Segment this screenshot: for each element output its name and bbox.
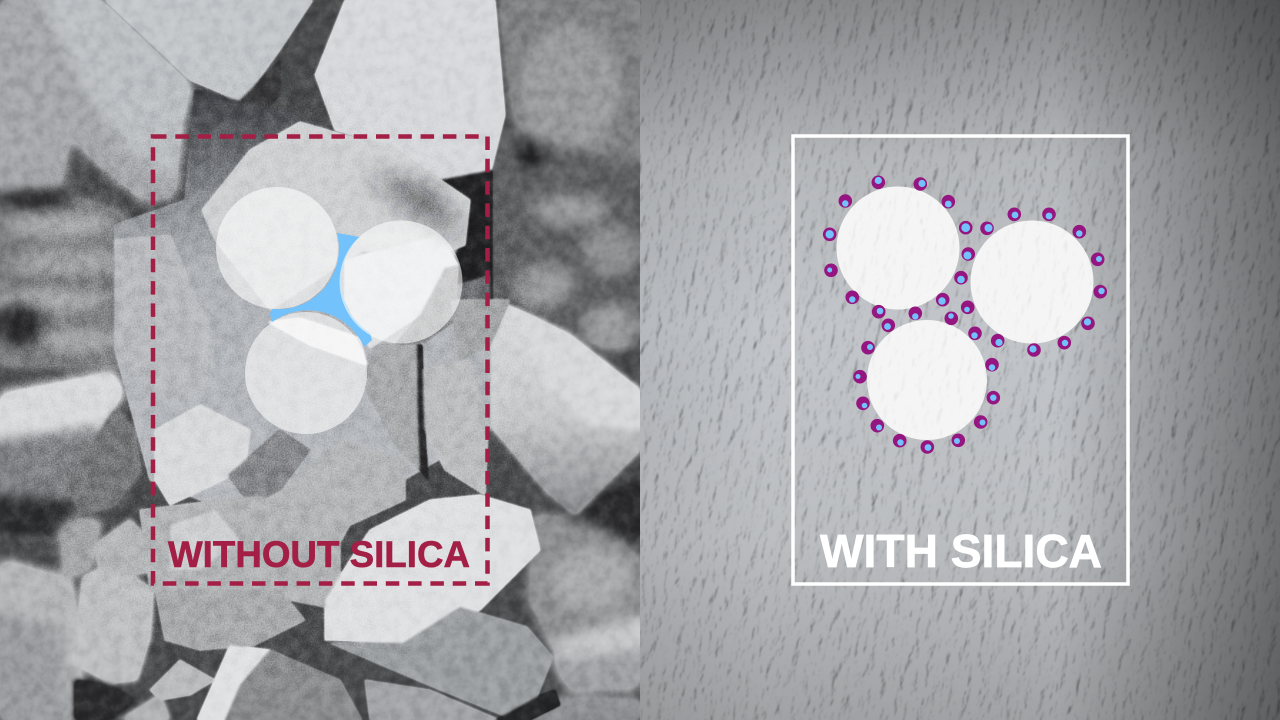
photo: central rock <box>115 122 560 720</box>
photo: powder mottling <box>0 0 640 720</box>
label: with silica: WITH SILICA <box>820 525 1102 577</box>
photo: blurred cracked powder edges <box>0 0 640 720</box>
diagram: three white particles <box>836 186 1094 440</box>
panel: with silica <box>640 0 1280 720</box>
photo: shadow on central rock <box>365 175 465 240</box>
photo: powder grain texture <box>0 59 549 696</box>
photo: textured powder surface <box>640 0 1280 720</box>
label: without silica: WITHOUT SILICA <box>168 534 470 575</box>
photo: mid-focus rocks <box>70 300 640 720</box>
diagram: silica particles coating the particles <box>823 176 1107 454</box>
diagram: blue binder between particles <box>270 233 372 347</box>
photo: top rocks <box>105 0 505 540</box>
dashed frame: without silica <box>153 136 488 584</box>
frame: with silica <box>793 136 1128 584</box>
diagram: three translucent particles <box>216 187 462 434</box>
panel: without silica <box>0 0 640 720</box>
